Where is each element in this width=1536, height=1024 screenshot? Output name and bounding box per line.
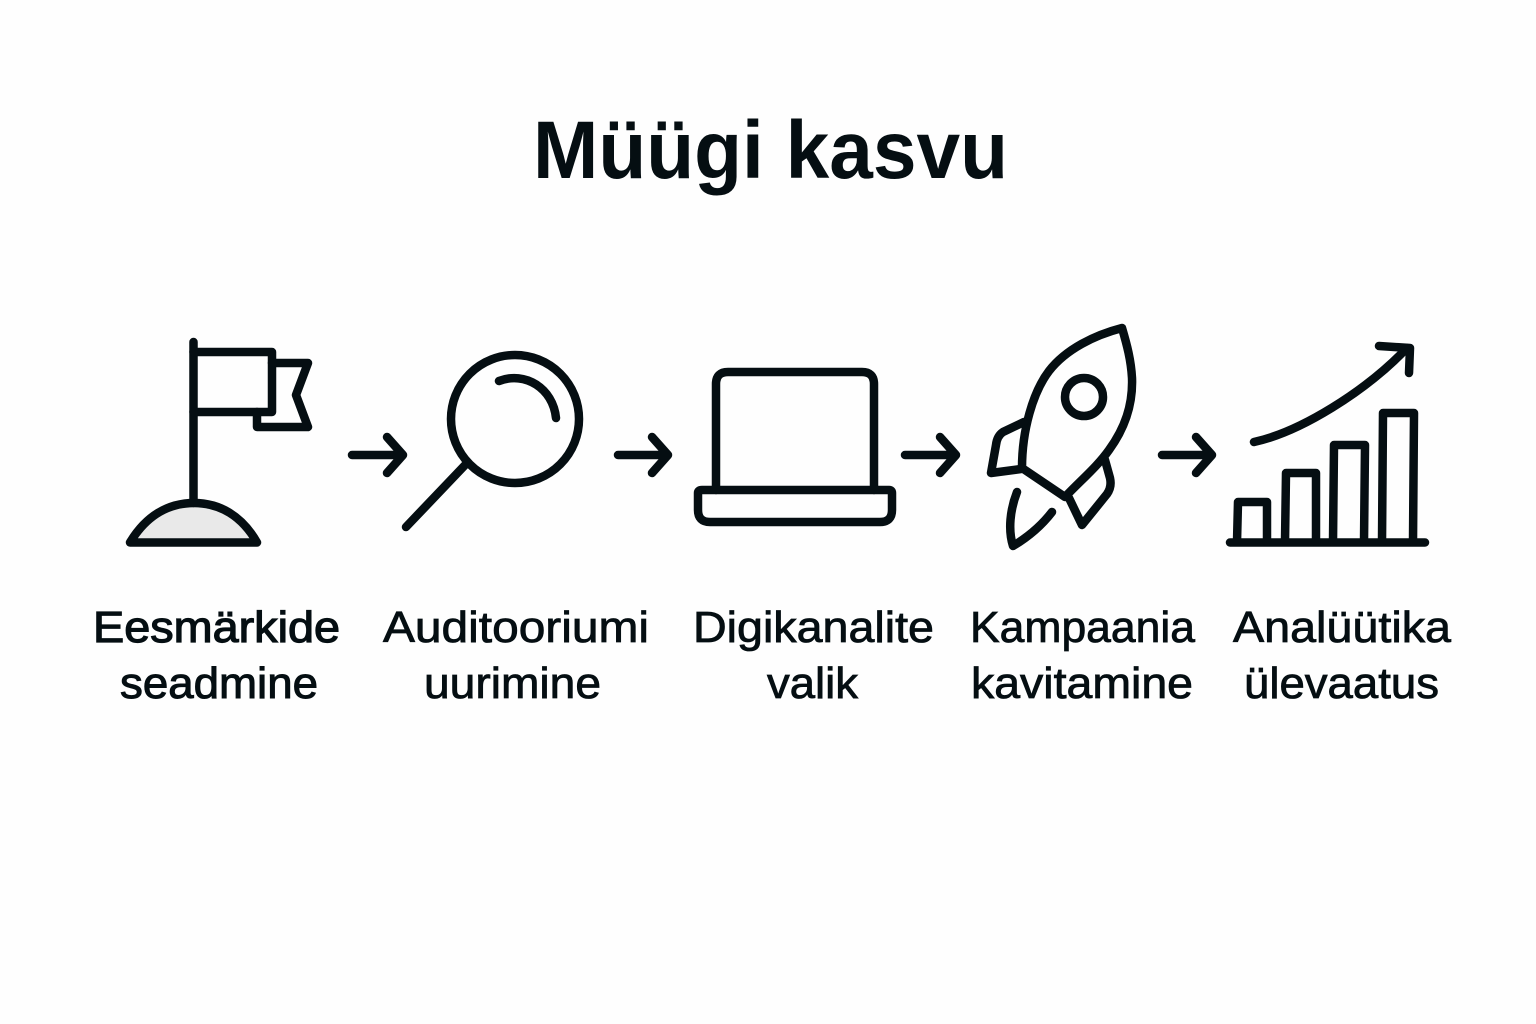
label: goal setting: Eesmärkide [93, 603, 340, 652]
label: audience research [383, 603, 649, 708]
label: campaign launch: Kampaania [970, 603, 1196, 652]
label: analytics review [1233, 603, 1452, 708]
arrow: channels to campaign [905, 437, 956, 473]
label: audience research: Auditooriumi [383, 603, 649, 652]
icon: rocket [991, 328, 1132, 546]
arrow: campaign to analytics [1162, 437, 1212, 473]
icon: flag on a hill [130, 342, 308, 542]
arrow: goals to audience [352, 437, 403, 473]
label: audience research: uurimine [424, 659, 601, 708]
label: goal setting: seadmine [120, 659, 318, 708]
label: analytics review: Analüütika [1233, 603, 1452, 652]
icon: rising bar chart [1230, 346, 1425, 542]
label: goal setting [93, 603, 340, 708]
label: analytics review: ülevaatus [1244, 659, 1439, 708]
label: campaign launch [970, 603, 1196, 708]
icon: laptop [698, 372, 892, 522]
label: campaign launch: kavitamine [971, 659, 1193, 708]
label: digital channel selection: valik [767, 659, 859, 708]
label: digital channel selection: Digikanalite [693, 603, 934, 652]
arrow: audience to channels [618, 437, 668, 473]
label: digital channel selection [693, 603, 934, 708]
icon: magnifying glass [406, 355, 579, 527]
title: Müügi kasvu [533, 105, 1008, 196]
